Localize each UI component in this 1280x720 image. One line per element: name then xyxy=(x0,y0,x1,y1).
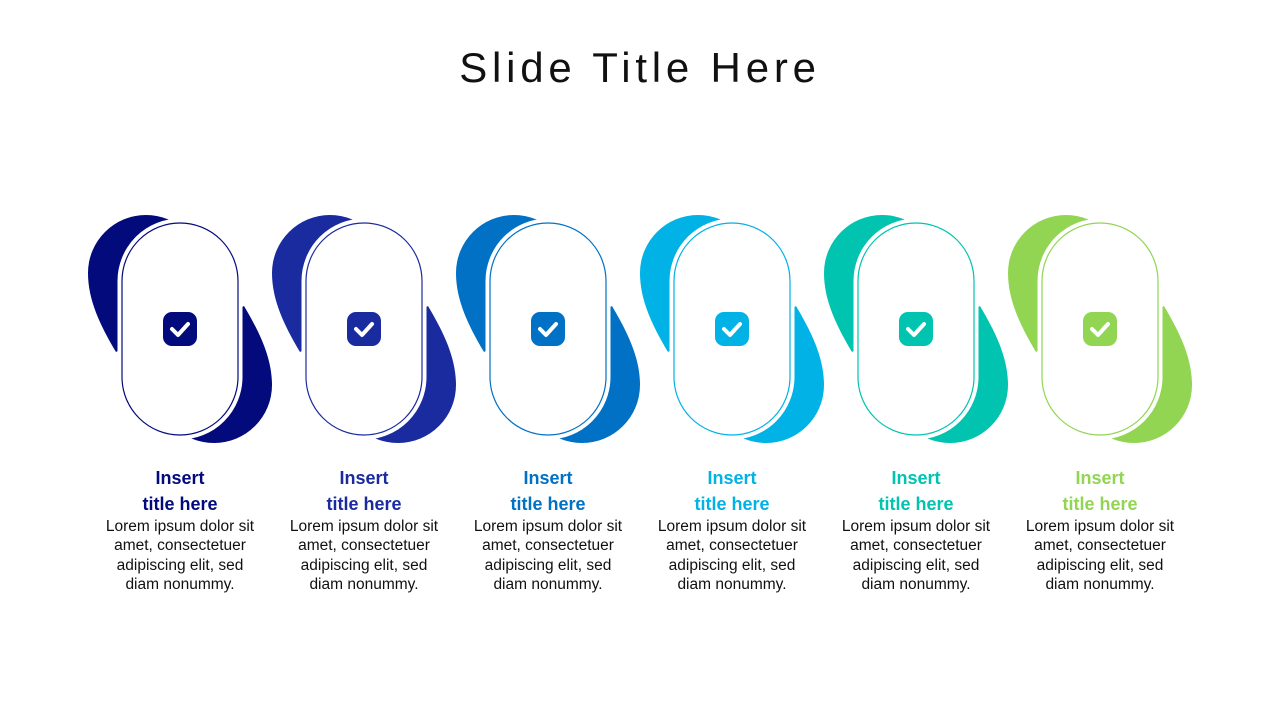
unit 3 xyxy=(456,215,640,443)
caption 3: Insert xyxy=(523,468,573,488)
unit 1 xyxy=(88,215,272,443)
unit 5 xyxy=(824,215,1008,443)
caption 6: Insert xyxy=(1075,468,1125,488)
caption 2 xyxy=(290,468,438,593)
caption 5: title here xyxy=(878,494,954,514)
caption 4: Insert xyxy=(707,468,757,488)
caption 2: Insert xyxy=(339,468,389,488)
icon: check xyxy=(347,312,381,346)
unit 6 xyxy=(1008,215,1192,443)
icon: check xyxy=(1083,312,1117,346)
icon: check xyxy=(163,312,197,346)
unit 4 xyxy=(640,215,824,443)
caption 4: title here xyxy=(694,494,770,514)
caption 6 xyxy=(1026,468,1174,593)
caption 5 xyxy=(842,468,990,593)
caption 6: Lorem ipsum dolor sit amet, consectetuer adipiscing elit, sed diam nonummy. xyxy=(1026,518,1174,593)
title: Slide Title Here xyxy=(459,44,821,91)
caption 1: title here xyxy=(142,494,218,514)
caption 3 xyxy=(474,468,622,593)
caption 6: title here xyxy=(1062,494,1138,514)
caption 3: Lorem ipsum dolor sit amet, consectetuer adipiscing elit, sed diam nonummy. xyxy=(474,518,622,593)
caption 5: Insert xyxy=(891,468,941,488)
caption 1: Insert xyxy=(155,468,205,488)
caption 1 xyxy=(106,468,254,593)
icon: check xyxy=(899,312,933,346)
caption 4 xyxy=(658,468,806,593)
caption 1: Lorem ipsum dolor sit amet, consectetuer adipiscing elit, sed diam nonummy. xyxy=(106,518,254,593)
caption 2: Lorem ipsum dolor sit amet, consectetuer adipiscing elit, sed diam nonummy. xyxy=(290,518,438,593)
unit 2 xyxy=(272,215,456,443)
caption 4: Lorem ipsum dolor sit amet, consectetuer adipiscing elit, sed diam nonummy. xyxy=(658,518,806,593)
caption 3: title here xyxy=(510,494,586,514)
caption 2: title here xyxy=(326,494,402,514)
icon: check xyxy=(715,312,749,346)
caption 5: Lorem ipsum dolor sit amet, consectetuer adipiscing elit, sed diam nonummy. xyxy=(842,518,990,593)
icon: check xyxy=(531,312,565,346)
